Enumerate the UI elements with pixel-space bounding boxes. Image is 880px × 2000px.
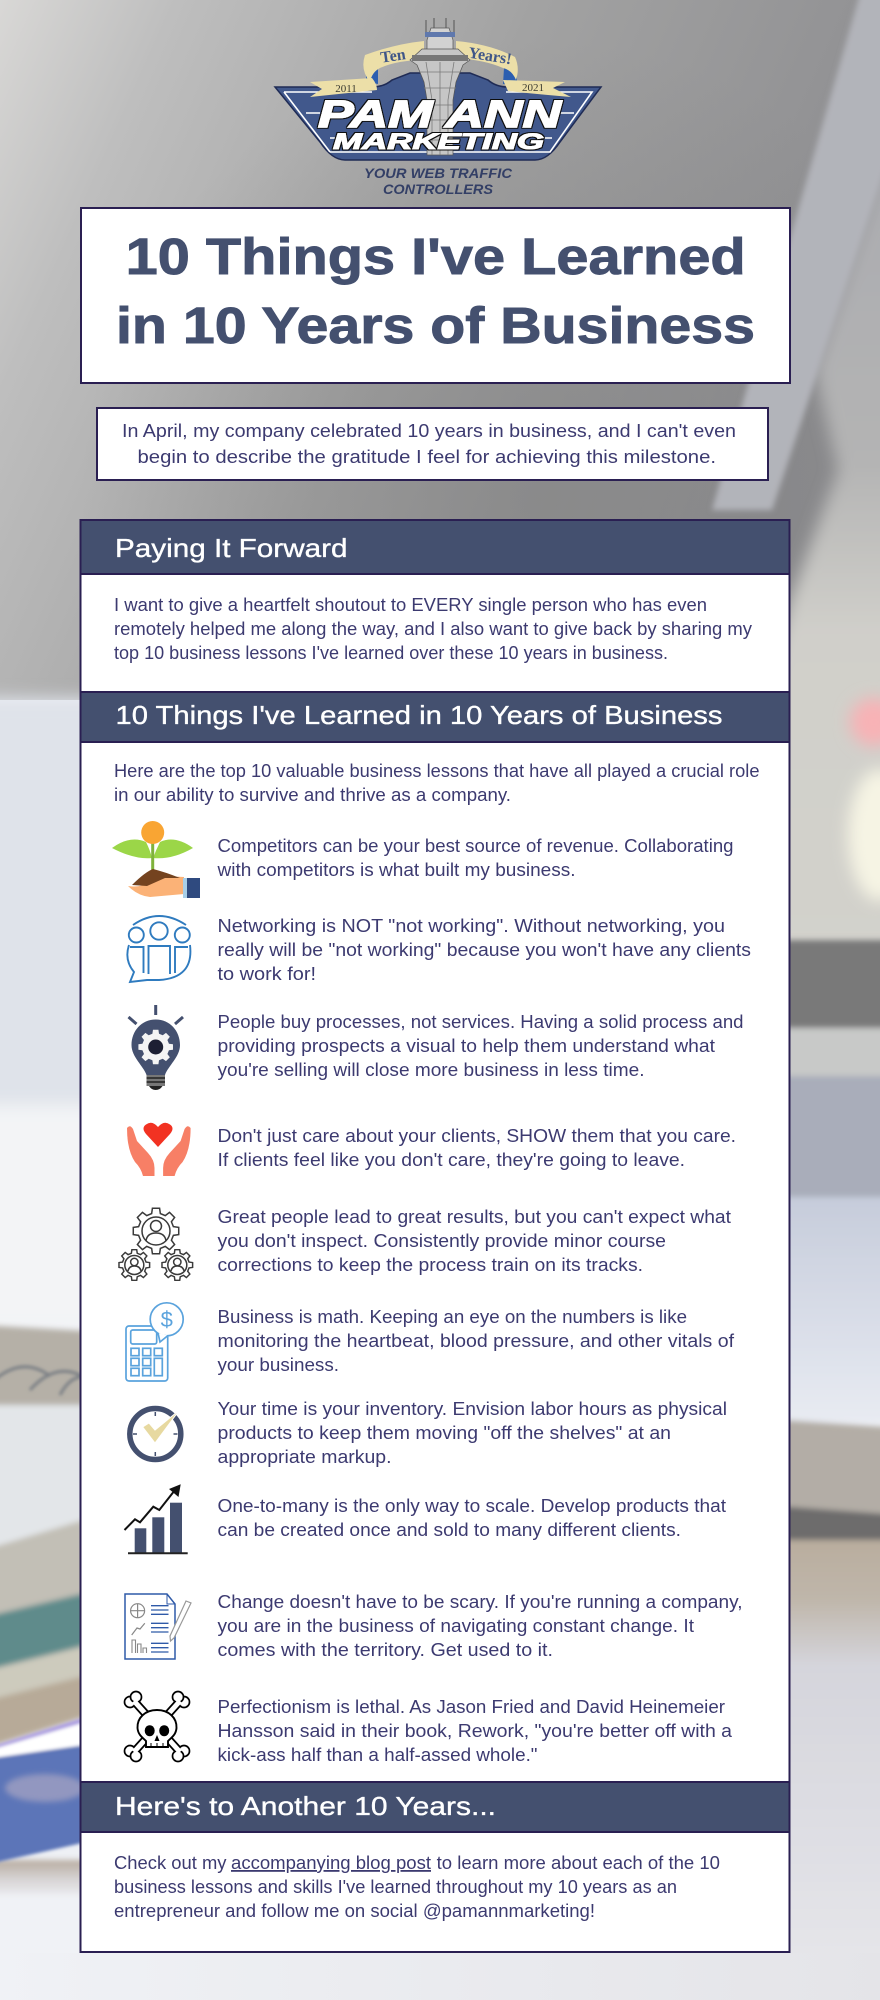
lesson 6 text: your business. — [218, 1355, 339, 1375]
lesson 1 text — [216, 836, 734, 880]
logo wordmark — [318, 94, 563, 154]
lesson 10 text: kick-ass half than a half-assed whole." — [218, 1745, 538, 1765]
paragraph: closing with blog link: Check out my — [114, 1853, 226, 1873]
logo wordmark: PAM ANN — [318, 94, 563, 136]
lesson 3 text: providing prospects a visual to help them understand what — [218, 1036, 715, 1056]
lesson 6 text: Business is math. Keeping an eye on the numbers is like — [218, 1307, 687, 1327]
icon: gears with people — [119, 1208, 193, 1280]
paragraph: lessons intro: in our ability to survive and thrive as a company. — [114, 785, 511, 805]
lesson 5 text — [218, 1207, 731, 1275]
intro box — [97, 408, 768, 480]
logo banner: Years! — [467, 45, 513, 68]
logo wordmark: MARKETING — [333, 129, 544, 154]
logo banner: Ten — [379, 46, 407, 67]
logo banner — [310, 41, 571, 97]
icon: calculator with dollar — [126, 1303, 183, 1381]
lesson 6 text — [218, 1307, 735, 1375]
section header: Here's to Another 10 Years — [80, 1782, 790, 1832]
icon: light bulb gear — [128, 1005, 183, 1090]
title box: in 10 Years of Business — [116, 297, 755, 354]
lesson 6 text: monitoring the heartbeat, blood pressure, and other vitals of — [218, 1331, 735, 1351]
lesson 5 text: Great people lead to great results, but you can't expect what — [218, 1207, 731, 1227]
logo banner: 2011 — [335, 83, 357, 95]
lesson 7 text: Your time is your inventory. Envision labor hours as physical — [218, 1399, 727, 1419]
paragraph: thanks — [114, 595, 752, 663]
lesson 10 text: Hansson said in their book, Rework, "you're better off with a — [218, 1721, 733, 1741]
lesson 8 text: can be created once and sold to many different clients. — [218, 1520, 681, 1540]
lesson 2 text: to work for! — [218, 964, 316, 984]
lesson 5 text: corrections to keep the process train on its tracks. — [218, 1255, 643, 1275]
lesson 8 text: One-to-many is the only way to scale. Develop products that — [218, 1496, 726, 1516]
lesson 5 text: you don't inspect. Consistently provide minor course — [218, 1231, 666, 1251]
lesson 7 text — [218, 1399, 727, 1467]
lesson 1 text: with competitors is what built my business. — [216, 860, 576, 880]
icon: hands holding heart — [127, 1123, 191, 1176]
icon: calculator with dollar: $ — [161, 1307, 173, 1332]
lesson 4 text — [218, 1126, 736, 1170]
lesson 3 text: People buy processes, not services. Having a solid process and — [218, 1012, 744, 1032]
logo banner: 2021 — [522, 82, 544, 94]
paragraph: closing with blog link: to learn more about each of the 10 — [437, 1853, 720, 1873]
section header: Paying It Forward: Paying It Forward — [115, 533, 348, 563]
section header: 10 Things: 10 Things I've Learned in 10 Years of Business — [116, 700, 723, 730]
title box: 10 Things I've Learned — [126, 228, 746, 285]
paragraph: thanks: remotely helped me along the way, and I also want to give back by sharing my — [114, 619, 752, 639]
section header: 10 Things — [80, 692, 790, 742]
icon: growth chart — [124, 1484, 188, 1553]
lesson 3 text: you're selling will close more business in less time. — [218, 1060, 644, 1080]
logo tagline: YOUR WEB TRAFFIC — [364, 165, 513, 181]
paragraph: closing with blog link: business lessons and skills I've learned throughout my 10 years as an — [114, 1877, 677, 1897]
section header: Paying It Forward — [80, 520, 790, 574]
lesson 10 text — [218, 1697, 733, 1765]
lesson 10 text: Perfectionism is lethal. As Jason Fried and David Heinemeier — [218, 1697, 725, 1717]
paragraph: closing with blog link — [114, 1853, 720, 1921]
lesson 2 text: Networking is NOT "not working". Without networking, you — [218, 916, 725, 936]
intro box: begin to describe the gratitude I feel for achieving this milestone. — [138, 447, 716, 467]
lesson 9 text — [218, 1592, 742, 1660]
title box — [81, 208, 790, 383]
icon: clock with check — [130, 1408, 181, 1460]
logo: Pam Ann Marketing ten years — [275, 18, 601, 197]
icon: skull and crossbones — [124, 1692, 190, 1762]
lesson 7 text: appropriate markup. — [218, 1447, 392, 1467]
lesson 2 text — [218, 916, 751, 984]
lesson 8 text — [218, 1496, 726, 1540]
lesson 4 text: Don't just care about your clients, SHOW them that you care. — [218, 1126, 736, 1146]
lesson 1 text: Competitors can be your best source of revenue. Collaborating — [218, 836, 734, 856]
logo shield — [275, 73, 601, 160]
lesson 4 text: If clients feel like you don't care, they're going to leave. — [218, 1150, 685, 1170]
intro box: In April, my company celebrated 10 years in business, and I can't even — [122, 421, 736, 441]
icon: document with pencil — [125, 1594, 191, 1659]
lesson 9 text: you are in the business of navigating constant change. It — [218, 1616, 694, 1636]
paragraph: closing with blog link: entrepreneur and follow me on social @pamannmarketing! — [114, 1901, 595, 1921]
paragraph: thanks: I want to give a heartfelt shoutout to EVERY single person who has even — [114, 595, 707, 615]
paragraph: lessons intro: Here are the top 10 valuable business lessons that have all played a crucial role — [114, 761, 760, 781]
lesson 9 text: comes with the territory. Get used to it. — [218, 1640, 553, 1660]
icon: plant in hand — [112, 821, 200, 898]
lesson 9 text: Change doesn't have to be scary. If you're running a company, — [218, 1592, 742, 1612]
lesson 3 text — [218, 1012, 744, 1080]
logo tower — [410, 18, 470, 155]
icon: networking group — [127, 916, 190, 982]
logo tagline: CONTROLLERS — [383, 181, 494, 197]
paragraph: thanks: top 10 business lessons I've learned over these 10 years in business. — [114, 643, 668, 663]
section header: Here's to Another 10 Years: Here's to Another 10 Years... — [115, 1791, 496, 1821]
lesson 7 text: products to keep them moving "off the shelves" at an — [218, 1423, 671, 1443]
paragraph: closing with blog link: accompanying blog post — [231, 1853, 431, 1873]
paragraph: lessons intro — [114, 761, 760, 805]
lesson 2 text: really will be "not working" because you won't have any clients — [218, 940, 751, 960]
logo tagline — [364, 165, 513, 197]
main panel — [80, 520, 790, 1952]
